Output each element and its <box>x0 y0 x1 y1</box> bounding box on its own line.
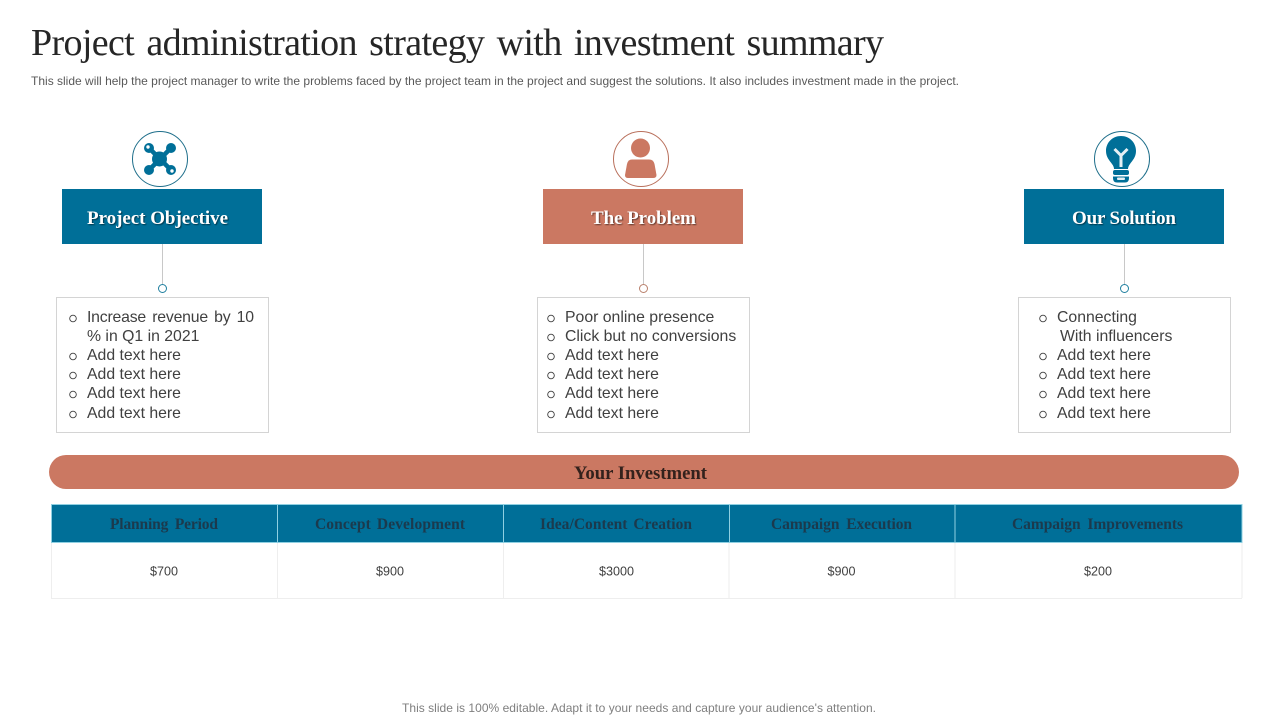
icon: light bulb <box>1094 132 1150 186</box>
text block: problem list <box>538 298 750 432</box>
text block: objective list: Add text here <box>87 385 181 402</box>
text block: solution list: Add text here <box>1057 366 1151 383</box>
footer note: This slide is 100% editable. Adapt it to your needs and capture your audience's attention. <box>402 701 876 715</box>
table header row: Concept Development <box>315 516 466 533</box>
text block: solution list: Add text here <box>1057 347 1151 364</box>
heading box: Project Objective <box>62 189 262 244</box>
table header row: Idea/Content Creation <box>540 516 692 533</box>
title: Project administration strategy with investment summary <box>31 22 884 64</box>
text block: problem list: Add text here <box>565 385 659 402</box>
table value row: $700 <box>150 564 178 578</box>
text block: objective list: % in Q1 in 2021 <box>87 328 200 345</box>
table value row: $200 <box>1084 564 1112 578</box>
table value row: $900 <box>828 564 856 578</box>
text block: problem list: Add text here <box>565 366 659 383</box>
table header row: Planning Period <box>110 516 218 533</box>
icon: network nodes <box>132 132 188 186</box>
heading box: The Problem <box>543 189 743 244</box>
heading box: The Problem: The Problem <box>591 208 696 229</box>
text block: solution list: Connecting <box>1057 309 1137 326</box>
connector <box>640 244 648 292</box>
text block: solution list: Add text here <box>1057 385 1151 402</box>
text block: objective list: Add text here <box>87 347 181 364</box>
panel: our solution <box>1018 132 1230 432</box>
panel: the problem <box>538 132 750 432</box>
text block: problem list: Click but no conversions <box>565 328 736 345</box>
table header row <box>51 504 1242 543</box>
text block: objective list: Increase revenue by 10 <box>87 309 254 326</box>
connector <box>158 244 166 292</box>
connector <box>1120 244 1128 292</box>
icon: person <box>614 132 668 186</box>
heading box: Our Solution <box>1024 189 1224 244</box>
text block: objective list: Add text here <box>87 405 181 422</box>
banner: Your Investment <box>49 455 1239 489</box>
text block: problem list: Add text here <box>565 347 659 364</box>
table value row <box>51 543 1242 598</box>
text block: solution list <box>1018 298 1230 432</box>
heading box: Project Objective: Project Objective <box>87 208 228 229</box>
text block: problem list: Poor online presence <box>565 309 715 326</box>
table header row: Campaign Execution <box>771 516 912 533</box>
text block: objective list: Add text here <box>87 366 181 383</box>
table value row: $3000 <box>599 564 634 578</box>
subtitle: This slide will help the project manager to write the problems faced by the project team in the project and suggest the solutions. It also includes investment made in the project. <box>31 74 959 88</box>
table header row: Campaign Improvements <box>1012 516 1183 533</box>
table value row: $900 <box>376 564 404 578</box>
text block: solution list: Add text here <box>1057 405 1151 422</box>
text block: objective list <box>56 298 268 432</box>
text block: problem list: Add text here <box>565 405 659 422</box>
panel: project objective <box>56 132 268 432</box>
heading box: Our Solution: Our Solution <box>1072 208 1176 229</box>
text block: solution list: With influencers <box>1060 328 1172 345</box>
banner: Your Investment: Your Investment <box>574 463 708 484</box>
investment table <box>51 504 1242 598</box>
